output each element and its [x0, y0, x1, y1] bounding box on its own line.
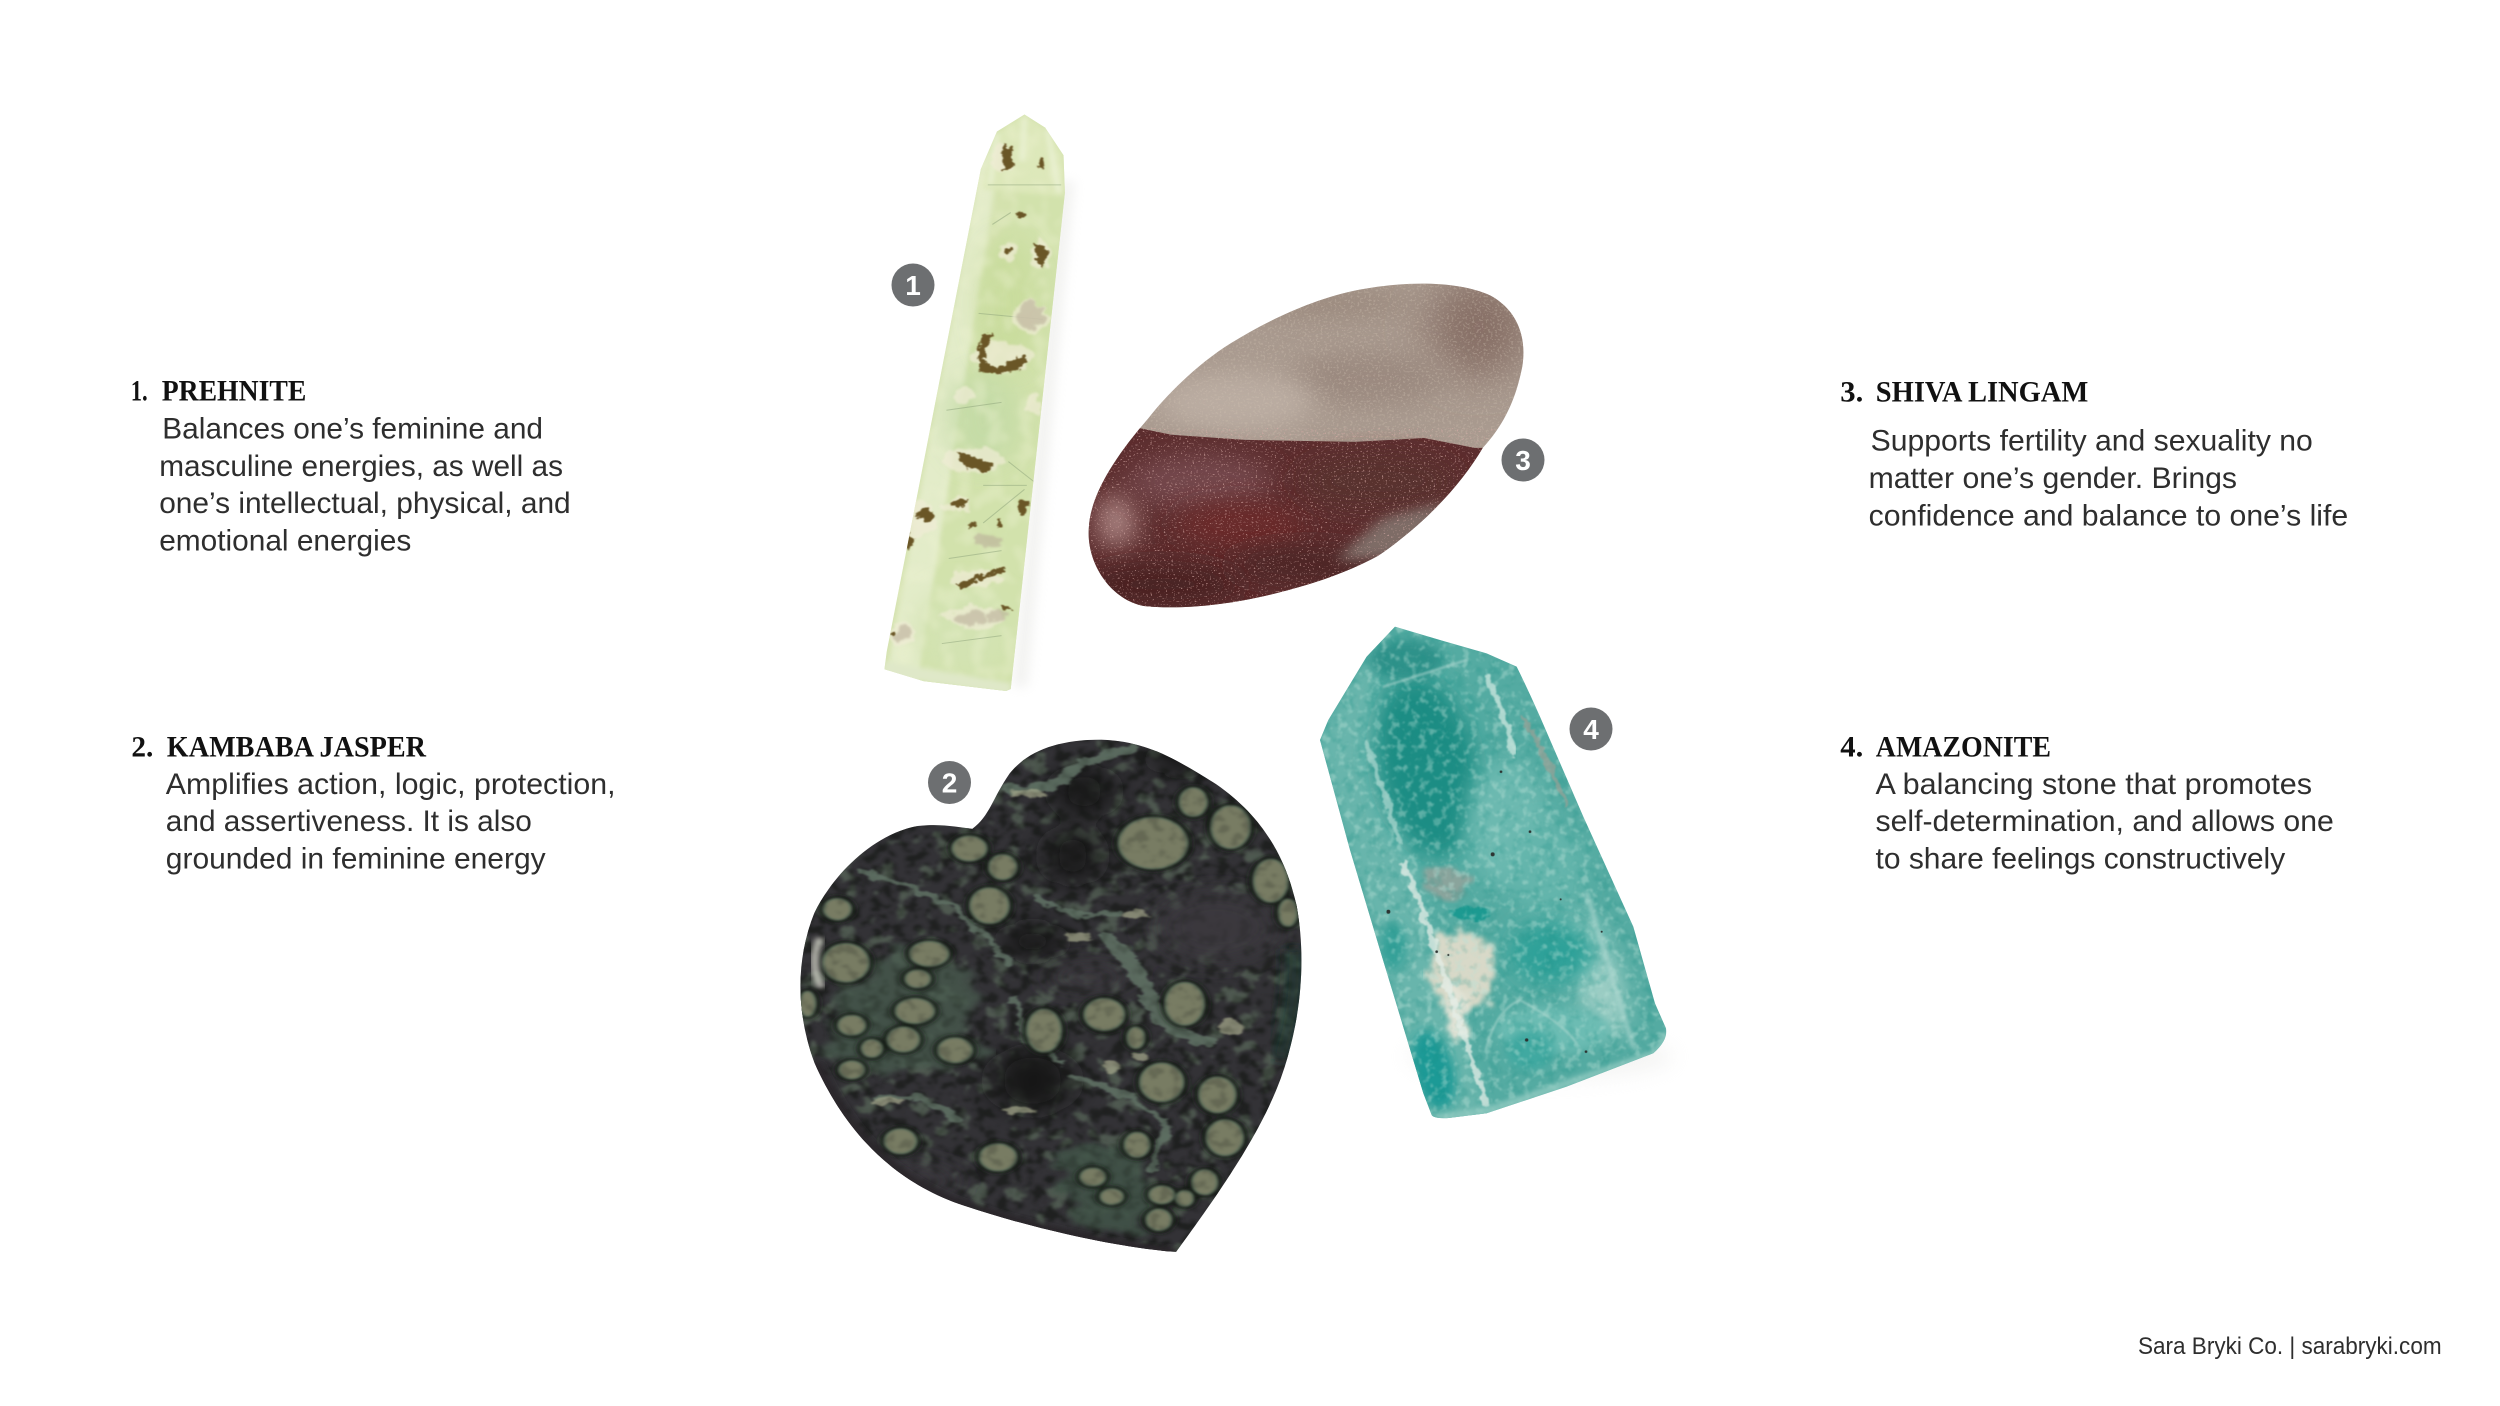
heading: shiva lingam: 3.: [1840, 375, 1863, 408]
heading: prehnite: 1.: [131, 375, 148, 408]
text: amazonite body: to share feelings constructively: [1876, 842, 2285, 875]
stone: shiva lingam: [1088, 284, 1524, 608]
text: shiva lingam body: [1869, 425, 2348, 532]
text: prehnite body: [159, 412, 571, 557]
maroon lower half: [1088, 428, 1496, 608]
badge 1: 1: [905, 270, 921, 301]
text: prehnite body: one’s intellectual, physical, and: [159, 487, 571, 520]
text: kambaba jasper body: Amplifies action, logic, protection,: [166, 768, 616, 801]
badge 3: [1502, 438, 1544, 482]
heading: amazonite: AMAZONITE: [1876, 731, 2051, 764]
text: kambaba jasper body: grounded in feminine energy: [166, 842, 546, 875]
stone: amazonite: [1313, 623, 1673, 1123]
panel: amazonite description: [1840, 731, 2334, 875]
text: prehnite body: emotional energies: [159, 524, 411, 557]
inclusions: [889, 143, 1050, 645]
text: kambaba jasper body: [166, 768, 616, 875]
badge 2: 2: [942, 768, 957, 798]
text: kambaba jasper body: and assertiveness. It is also: [166, 805, 532, 838]
text: shiva lingam body: Supports fertility and sexuality no: [1871, 425, 2313, 458]
heading: amazonite: 4.: [1840, 731, 1863, 764]
text: prehnite body: masculine energies, as well as: [159, 450, 563, 483]
text: shiva lingam body: confidence and balance to one’s life: [1869, 499, 2348, 532]
panel: kambaba jasper description: [131, 731, 616, 875]
footer credit: Sara Bryki Co. | sarabryki.com: [2138, 1333, 2442, 1360]
badge 4: 4: [1583, 714, 1599, 745]
heading: kambaba jasper: 2.: [131, 731, 153, 764]
badge 1: [892, 264, 934, 306]
badge 2: [928, 761, 971, 804]
panel: prehnite description: [131, 375, 571, 557]
badge 3: 3: [1515, 445, 1531, 476]
text: amazonite body: self-determination, and allows one: [1876, 805, 2334, 838]
heading: prehnite: PREHNITE: [162, 375, 306, 408]
stone: kambaba jasper heart: [791, 734, 1314, 1256]
stone: prehnite: [878, 110, 1070, 699]
text: amazonite body: [1876, 768, 2334, 875]
heading: kambaba jasper: KAMBABA JASPER: [167, 731, 426, 764]
text: amazonite body: A balancing stone that promotes: [1876, 768, 2312, 801]
heading: shiva lingam: SHIVA LINGAM: [1876, 375, 2088, 408]
panel: shiva lingam description: [1840, 375, 2348, 532]
text: prehnite body: Balances one’s feminine and: [162, 412, 543, 446]
text: shiva lingam body: matter one’s gender. Brings: [1869, 462, 2237, 495]
badge 4: [1570, 708, 1612, 750]
